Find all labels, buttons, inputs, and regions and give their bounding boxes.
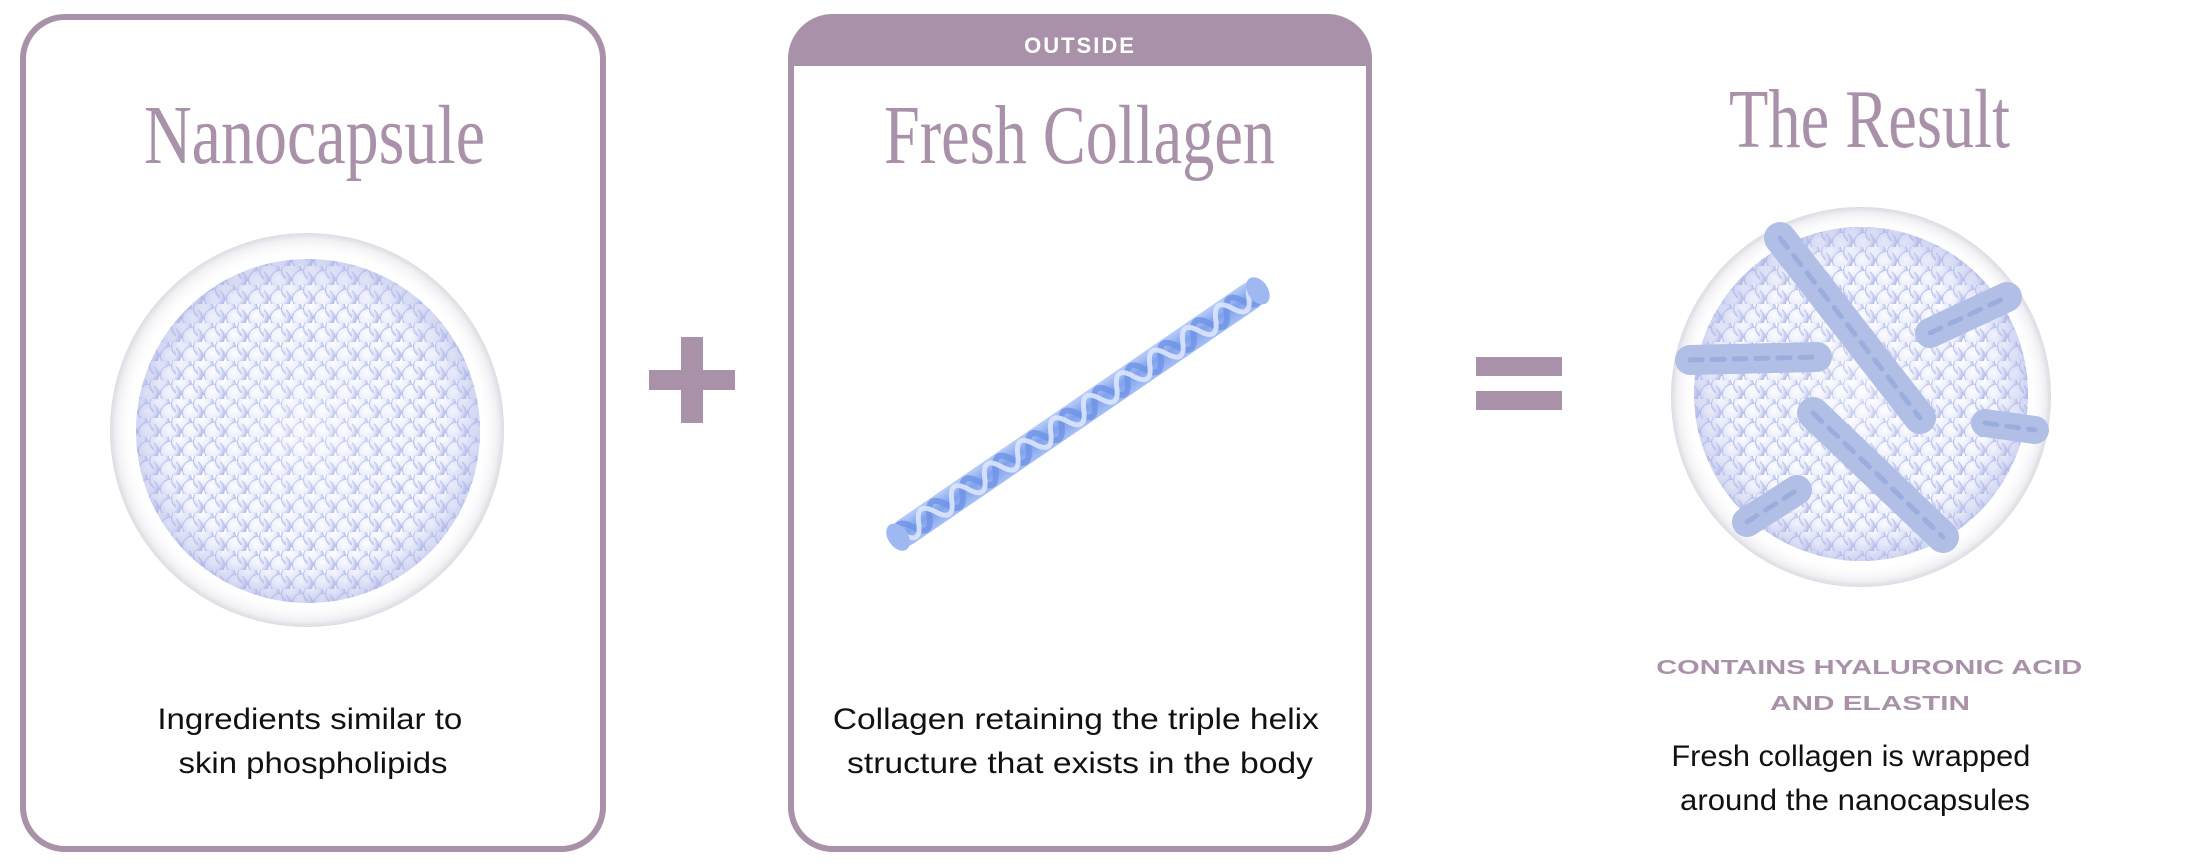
text: nanocapsule description: Ingredients similar to [157,703,462,736]
subheading: contains hyaluronic acid and elastin: AND ELASTIN [1770,693,1970,715]
text: result description: around the nanocapsules [1680,784,2030,817]
icon: plus sign [649,337,735,423]
icon: collagen triple helix [881,273,1275,555]
text: result description: Fresh collagen is wrapped [1671,740,2030,773]
panel: nanocapsule card [23,17,603,849]
text: collagen description: structure that exists in the body [847,747,1313,780]
icon: nanocapsule wrapped in collagen [1671,207,2051,587]
text: collagen description: Collagen retaining the triple helix [833,703,1319,736]
header band: outside: OUTSIDE [1024,33,1136,58]
heading: Fresh Collagen: Fresh Collagen [884,89,1275,182]
text: nanocapsule description: skin phospholipids [178,747,448,780]
heading: The Result: The Result [1729,73,2010,166]
subheading: contains hyaluronic acid and elastin: CONTAINS HYALURONIC ACID [1656,657,2082,679]
panel: the result [1656,73,2088,817]
icon: equals sign [1476,357,1562,410]
header band: outside [791,17,1369,63]
panel: fresh collagen card [791,17,1369,849]
heading: Nanocapsule: Nanocapsule [144,89,485,182]
icon: nanocapsule sphere [110,233,504,627]
